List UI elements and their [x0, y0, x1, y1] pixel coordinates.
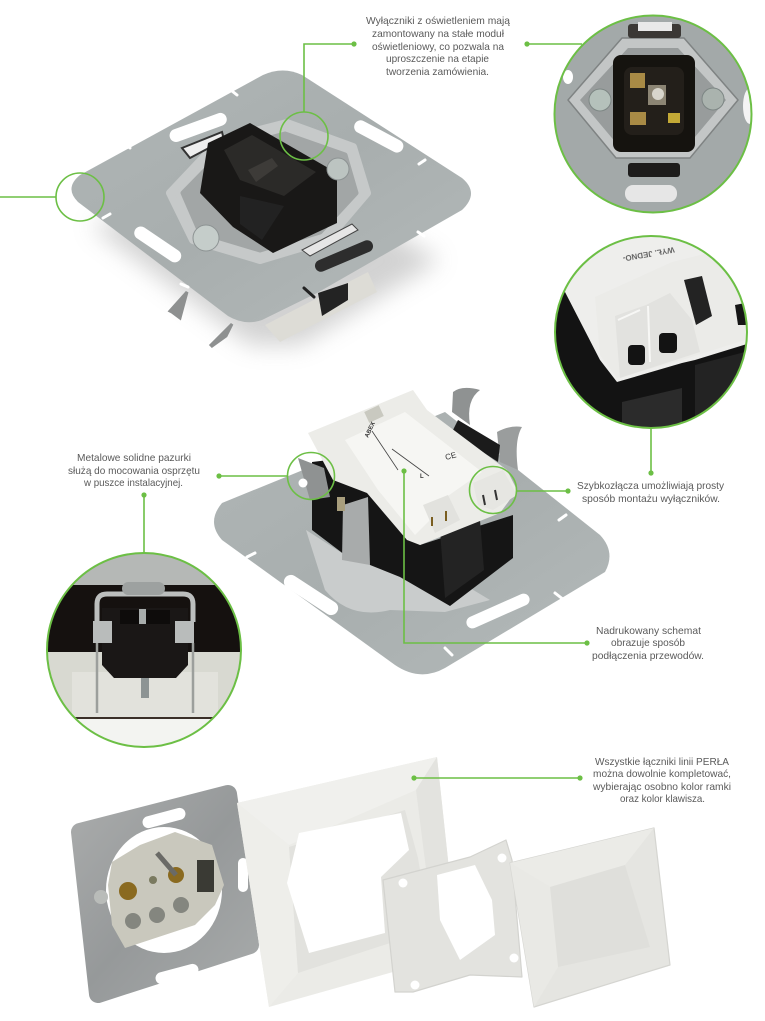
- photo: switch insert rear view with white cap: ABEX: [364, 421, 377, 439]
- text: PERŁA line description: oraz kolor klawisza.: [620, 794, 705, 805]
- text: printed diagram description: Nadrukowany schemat: [596, 626, 701, 637]
- detail circle: module seen from above: [556, 16, 750, 212]
- adapter frame: [383, 840, 522, 992]
- callout ring: plate edge: [56, 173, 104, 221]
- connector: frame to selection text: [411, 775, 583, 781]
- text: lighting module description: Wyłączniki z oświetleniem mają: [366, 16, 510, 27]
- text: printed diagram description: podłączenia przewodów.: [592, 651, 704, 662]
- detail circle ring 2: [555, 236, 747, 428]
- text: PERŁA line description: [592, 757, 731, 805]
- detail circle: quick connectors: WYŁ. JEDNO-: [622, 245, 675, 263]
- connector: detail circle 2 to quick connect text: [648, 428, 654, 476]
- text: lighting module description: tworzenia zamówienia.: [386, 67, 489, 78]
- text: PERŁA line description: Wszystkie łączniki linii PERŁA: [595, 757, 729, 768]
- connector: claw text to detail circle: [141, 492, 147, 553]
- detail circle: quick connectors: [556, 237, 746, 427]
- detail circle ring 3: [47, 553, 241, 747]
- white frame: [237, 757, 458, 1007]
- text: PERŁA line description: można dowolnie kompletować,: [593, 769, 731, 780]
- connector: claw text to ring: [216, 473, 288, 479]
- callout ring: quick connectors: [470, 466, 516, 514]
- text: printed diagram description: obrazuje sposób: [611, 638, 685, 649]
- callout ring: metal claw: [288, 452, 334, 500]
- metal plate with socket: [80, 794, 250, 994]
- connector: left edge to plate: [0, 196, 56, 198]
- connector: text to detail circle 1: [524, 41, 582, 47]
- connector: printed diagram to text: [401, 468, 590, 646]
- detail circle ring 1: [554, 16, 752, 212]
- cover key: [510, 828, 670, 1007]
- text: metal claws description: służą do mocowania osprzętu: [68, 466, 200, 477]
- text: quick connect description: Szybkozłącza umożliwiają prosty: [577, 481, 725, 492]
- photo: switch insert rear view with white cap: CE: [444, 450, 457, 462]
- photo: mounting plate with black module, top view: [71, 70, 471, 346]
- photo: switch insert rear view with white cap: [214, 388, 609, 674]
- text: quick connect description: [577, 481, 725, 505]
- text: metal claws description: [68, 453, 200, 489]
- text: lighting module description: [366, 16, 510, 78]
- photo: switch insert rear view with white cap: L: [420, 474, 424, 480]
- callout ring: lighting module: [280, 112, 328, 160]
- text: lighting module description: oświetleniowy, co pozwala na: [372, 42, 504, 53]
- text: metal claws description: Metalowe solidne pazurki: [77, 453, 191, 464]
- text: printed diagram description: [592, 626, 704, 662]
- text: lighting module description: zamontowany na stałe moduł: [372, 29, 505, 40]
- detail circle: metal claw close-up: [45, 550, 245, 751]
- connector: ring to quick connect text: [516, 488, 571, 494]
- text: metal claws description: w puszce instalacyjnej.: [83, 478, 183, 489]
- photo: exploded view of socket, frame, adapter and cover: [80, 757, 670, 1007]
- text: lighting module description: uproszczenie na etapie: [386, 54, 489, 65]
- connector: ring to lighting text: [304, 41, 357, 112]
- text: quick connect description: sposób montażu wyłączników.: [582, 494, 720, 505]
- text: PERŁA line description: wybierając osobno kolor ramki: [592, 782, 731, 793]
